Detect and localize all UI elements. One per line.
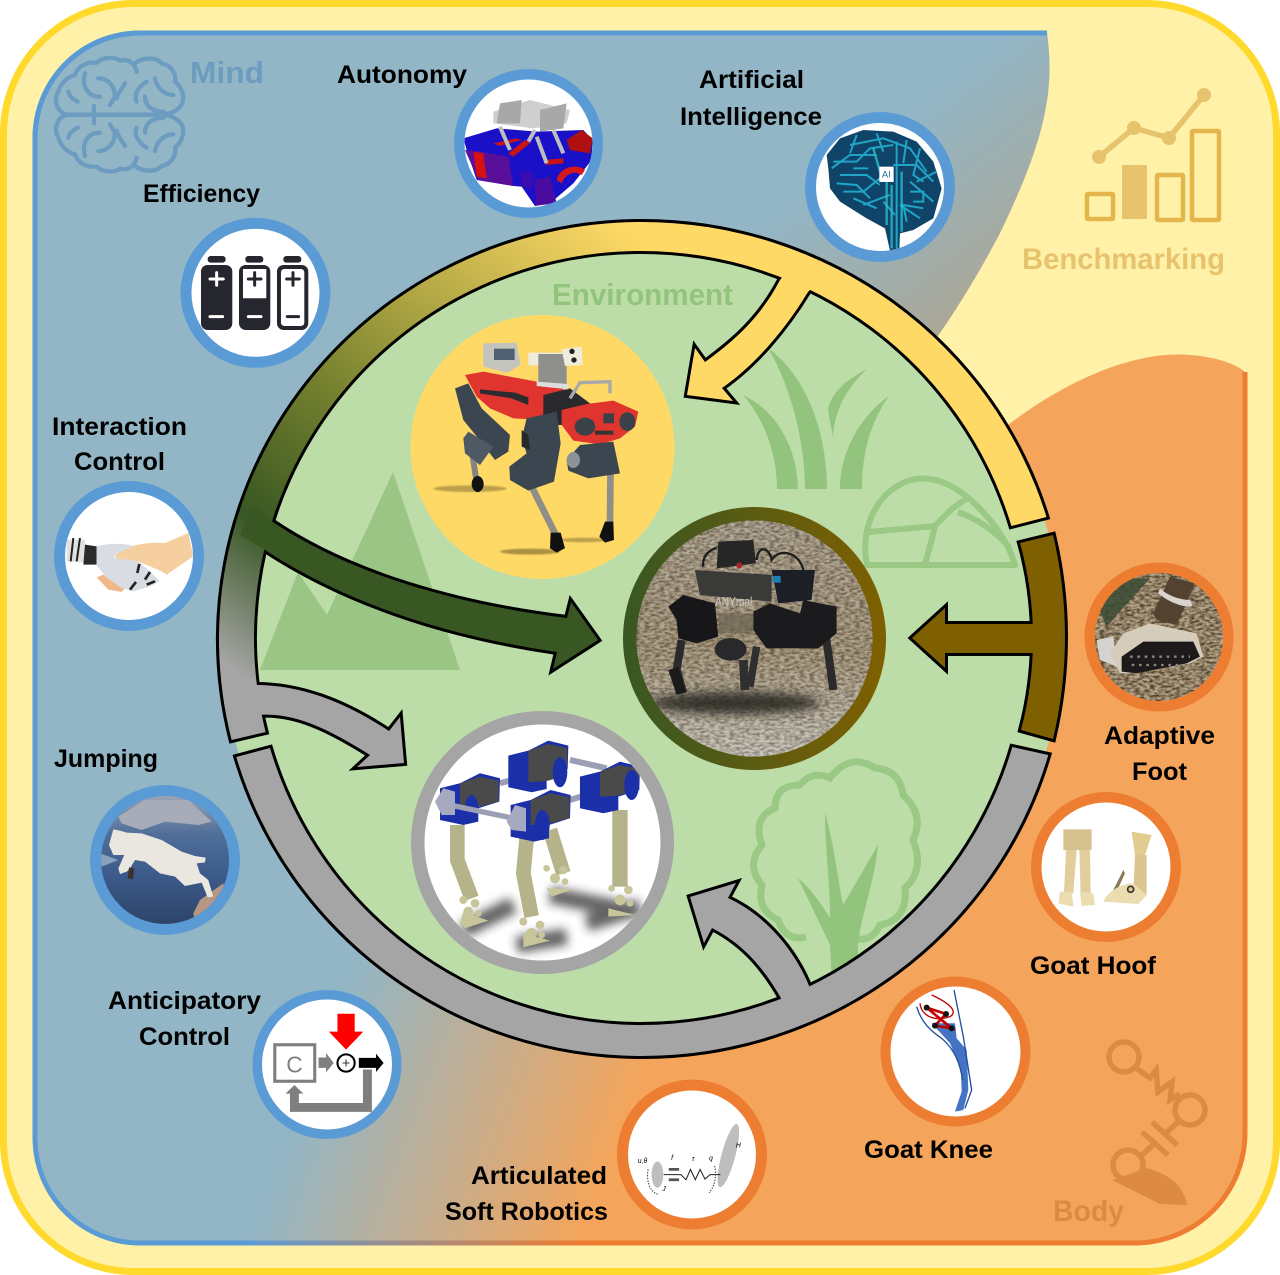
label: Adaptive Foot (1104, 722, 1215, 786)
label: Articulated Soft Robotics: Soft Robotics (445, 1198, 608, 1226)
image: knee tendon diagram (917, 990, 972, 1112)
circle: Artificial Intelligence (805, 112, 955, 262)
label: Artificial Intelligence: Intelligence (680, 103, 822, 131)
label: Anticipatory Control: Control (139, 1023, 230, 1051)
circle: Adaptive Foot (1084, 562, 1234, 712)
heading: Mind: Mind (190, 55, 264, 90)
photo: robot on gravel (636, 520, 874, 758)
circle: Goat Hoof (1031, 792, 1181, 942)
label: Interaction Control: Control (74, 448, 165, 476)
icon: benchmarking chart (1087, 88, 1219, 220)
ring segment: grey lower (236, 747, 1048, 1056)
circle: Efficiency (180, 218, 330, 368)
image: circuit brain: AI (882, 170, 891, 180)
icon: series elastic diagram: τ (692, 1156, 695, 1163)
arrow: dark green to field robot (240, 505, 598, 669)
label: Anticipatory Control: Anticipatory (108, 987, 261, 1015)
circle: Jumping (90, 785, 240, 935)
image: robot human handshake (67, 533, 193, 592)
heading: Environment: Environment (552, 277, 733, 312)
circle: ANYmal C on yellow (410, 315, 674, 579)
heading: Benchmarking: Benchmarking (1022, 243, 1225, 276)
icon: body spring mechanism (1109, 1042, 1205, 1205)
panel: environment disc (222, 223, 1062, 1053)
label: Jumping: Jumping (54, 745, 158, 773)
circle: Autonomy (454, 69, 603, 218)
circle: Articulated Soft Robotics (617, 1080, 767, 1230)
label: Goat Knee: Goat Knee (864, 1136, 993, 1164)
image: circuit brain (827, 130, 942, 251)
label: Articulated Soft Robotics (445, 1162, 608, 1226)
arrow: grey bottom to simulation robot (690, 883, 828, 1020)
arrow: brown to field robot (912, 608, 1048, 668)
label: Adaptive Foot: Foot (1132, 758, 1188, 786)
label: Anticipatory Control (108, 987, 261, 1051)
circle: Interaction Control (54, 481, 204, 631)
photo: adaptive foot on straw (1095, 573, 1223, 701)
label: Artificial Intelligence: Artificial (699, 66, 804, 94)
heading: Body: Body (1053, 1195, 1124, 1228)
icon: brain (56, 58, 183, 171)
image: leaping goat (100, 795, 232, 925)
icon: tree (754, 762, 918, 1002)
photo: robot on gravel: ANYmal (715, 595, 752, 609)
icon: three batteries (201, 256, 308, 330)
robot: red quadruped (433, 343, 638, 555)
circle: Goat Knee (880, 976, 1030, 1126)
label: Artificial Intelligence (680, 66, 822, 131)
label: Efficiency: Efficiency (143, 180, 260, 208)
icon: series elastic diagram: q (709, 1155, 713, 1162)
icon: series elastic diagram: f (671, 1155, 674, 1162)
icon: grass (743, 348, 889, 489)
icon: rock (865, 478, 1015, 565)
icon: series elastic diagram: J (661, 1186, 666, 1193)
circle: field robot photo (623, 507, 886, 770)
icon: series elastic diagram: u,θ (638, 1158, 648, 1165)
icon: control loop diagram: C (286, 1051, 303, 1077)
image: hoof prototypes (1058, 829, 1152, 907)
circle: simulated robot (411, 711, 674, 974)
ring with arrows (219, 222, 1065, 1056)
label: Autonomy: Autonomy (337, 61, 467, 89)
arrow: grey left to simulation robot (238, 685, 404, 767)
ring segment: benchmarking gradient (219, 222, 1046, 740)
icon: series elastic diagram (638, 1122, 743, 1194)
icon: control loop diagram (275, 1014, 384, 1107)
ring outlines (219, 222, 1065, 1056)
arrow: yellow to robot (687, 262, 828, 401)
image: robot on height map (463, 100, 593, 206)
circle: Anticipatory Control (252, 990, 402, 1139)
robot: blue actuators and tan legs (435, 741, 640, 947)
label: Adaptive Foot: Adaptive (1104, 722, 1215, 750)
label: Interaction Control: Interaction (52, 413, 187, 441)
ring segment: brown right (1020, 535, 1065, 739)
icon: mountain (260, 472, 460, 670)
label: Interaction Control (52, 413, 187, 476)
label: Goat Hoof: Goat Hoof (1030, 952, 1157, 980)
icon: series elastic diagram: H (736, 1143, 741, 1150)
label: Articulated Soft Robotics: Articulated (471, 1162, 607, 1190)
